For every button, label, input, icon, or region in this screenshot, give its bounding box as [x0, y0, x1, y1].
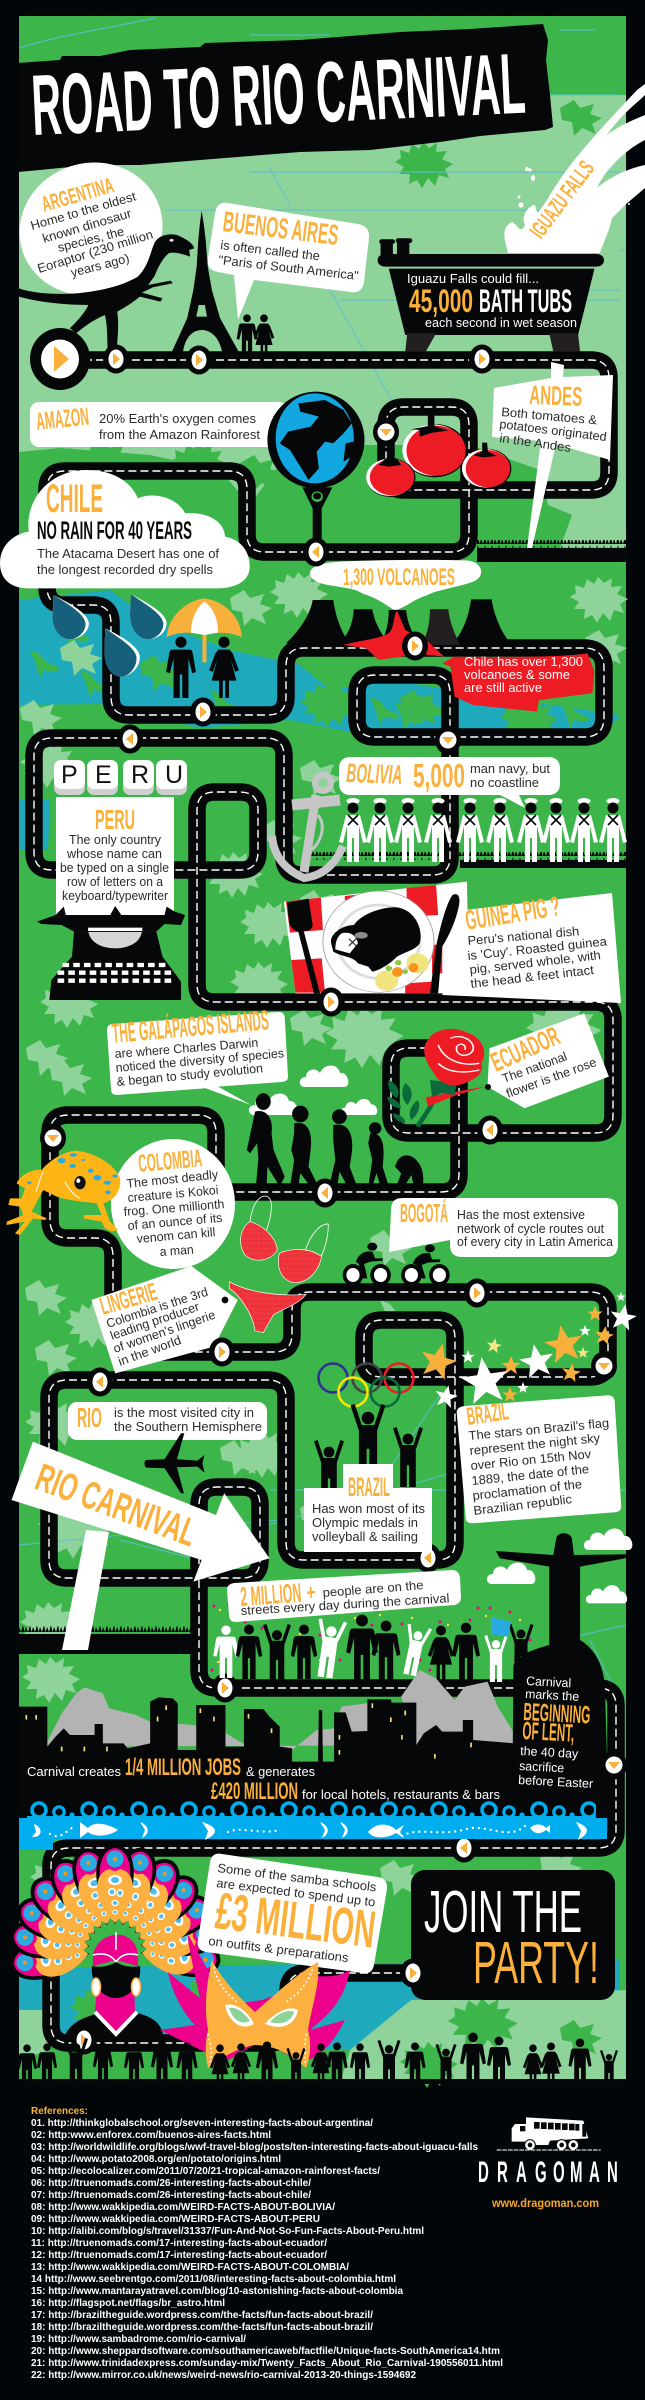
Rio text — [114, 1406, 262, 1434]
references list: 14 http://www.seebrentgo.com/2011/08/interesting-facts-about-colombia.html — [31, 2274, 396, 2285]
panel: Bogota bubble — [389, 1198, 618, 1257]
icon: Rio Carnival arrow sign — [12, 1442, 269, 1650]
references list: 09: http://www.wakkipedia.com/WEIRD-FACTS-ABOUT-PERU — [31, 2214, 320, 2225]
headdress cap and face — [93, 1935, 138, 1966]
icon: anchor — [272, 775, 343, 878]
water lines — [19, 18, 626, 1700]
references list: 04: http://www.potato2008.org/en/potato/origins.html — [31, 2154, 281, 2165]
tub text: Iguazu Falls could fill... — [407, 272, 539, 286]
panel: Brazil stars fact — [457, 1395, 621, 1523]
Galapagos text: noticed the diversity of species — [115, 1046, 285, 1075]
references list: 20: http://www.sheppardsoftware.com/southamericaweb/factfile/Unique-facts-SouthAmerica14.htm — [31, 2346, 500, 2357]
2 million text: streets every day during the carnival — [240, 1591, 450, 1618]
Lingerie text — [105, 1285, 217, 1369]
Chile text: the longest recorded dry spells — [37, 563, 213, 577]
panel: Rio — [68, 1402, 267, 1440]
title banner — [18, 24, 553, 172]
references list: 18: http://braziltheguide.wordpress.com/the-facts/fun-facts-about-brazil/ — [31, 2322, 373, 2333]
icon: tomatoes — [366, 415, 511, 497]
Peru key letters: P — [61, 761, 78, 789]
panel: Brazil podium — [304, 1464, 432, 1552]
Buenos Aires heading: BUENOS AIRES — [221, 206, 340, 252]
tub caption: each second in wet season — [425, 316, 577, 330]
references list: 03: http://worldwildlife.org/blogs/wwf-travel-blog/posts/ten-interesting-facts-about-iguacu-falls — [31, 2142, 478, 2153]
Amazon text: 20% Earth's oxygen comes — [99, 412, 256, 426]
icon: dinosaur — [19, 234, 194, 352]
5,000 number: 5,000 — [413, 757, 465, 794]
references list: 07: http://truenomads.com/26-interesting-facts-about-chile/ — [31, 2190, 311, 2201]
Brazil podium text: volleyball & sailing — [312, 1530, 418, 1544]
panel: mask — [160, 1933, 350, 2068]
Brazil text: proclamation of the — [472, 1477, 583, 1503]
Dragoman wordmark: DRAGOMAN — [478, 2157, 618, 2190]
Argentina heading: ARGENTINA — [38, 172, 117, 217]
panel: Andes sign — [492, 362, 613, 548]
Galapagos text: & began to study evolution — [116, 1061, 264, 1089]
Peru heading: PERU — [95, 804, 135, 835]
guinea pig text: Peru's national dish — [467, 924, 580, 948]
Peru text: keyboard/typewriter — [62, 889, 168, 903]
panel: Lent text — [518, 1674, 593, 1791]
Colombia text: frog. One millionth — [123, 1197, 225, 1219]
Bogota text: network of cycle routes out — [457, 1222, 604, 1236]
Christ the Redeemer statue — [496, 1533, 629, 1820]
Brazil podium text: Olympic medals in — [312, 1516, 418, 1530]
panel: guinea pig text — [442, 890, 621, 1003]
references list: 13: http://www.wakkipedia.com/WEIRD-FACTS-ABOUT-COLOMBIA/ — [31, 2262, 349, 2273]
Bolivia text: no coastline — [470, 776, 539, 790]
panel: Peru keys — [54, 760, 187, 795]
panel: jobs text: Carnival creates — [27, 1765, 121, 1779]
crowd confetti yellow — [218, 1610, 526, 1662]
Argentina text: species, the — [56, 224, 126, 255]
plus sign: + — [306, 1579, 316, 1605]
guinea pig text: pig, served whole, with — [469, 948, 601, 977]
volcano cloud — [310, 560, 481, 610]
references list: 05: http://ecolocalizer.com/2011/07/20/21-tropical-amazon-rainforest-facts/ — [31, 2166, 380, 2177]
Brazil text: Brazilian republic — [473, 1492, 573, 1518]
Rio text: the Southern Hemisphere — [114, 1420, 262, 1434]
stars — [417, 1292, 639, 1409]
icon: guinea pig on plate — [284, 882, 469, 993]
panel: Argentina — [3, 145, 179, 313]
bottom crowd — [17, 2033, 626, 2087]
panel: Colombia — [111, 1139, 235, 1269]
Bogota text: Has the most extensive — [457, 1208, 585, 1222]
icon: umbrella couple — [166, 598, 242, 698]
Bogota text: of every city in Latin America — [457, 1235, 613, 1249]
Lent caption — [518, 1744, 593, 1791]
references list: 06: http://truenomads.com/26-interesting-facts-about-chile/ — [31, 2178, 311, 2189]
Peru text: be typed on a single — [60, 861, 169, 875]
panel: Bolivia — [339, 757, 560, 808]
icon: Iguazu waterfall — [504, 84, 645, 253]
horizon grass strips — [19, 540, 626, 1654]
Colombia text: of an ounce of its — [127, 1211, 223, 1233]
3 million headline: £3 MILLION — [213, 1882, 378, 1959]
samba intro: are expected to spend up to — [216, 1876, 376, 1909]
Brazil text: 1889, the date of the — [471, 1462, 590, 1488]
sailors — [339, 798, 627, 862]
Peru text: row of letters on a — [67, 875, 163, 889]
Colombia text: a man — [159, 1243, 194, 1259]
Argentina text — [29, 189, 155, 280]
money headline: £420 MILLION — [211, 1778, 298, 1805]
lava text: Chile has over 1,300 — [464, 655, 583, 669]
Amazon text — [99, 412, 261, 442]
panel: Chile cloud: CHILE — [46, 477, 103, 521]
references list: 15: http://www.mantarayatravel.com/blog/10-astonishing-facts-about-colombia — [31, 2286, 403, 2297]
Iguazu Falls heading: IGUAZU FALLS — [524, 155, 599, 243]
crowd confetti — [212, 1604, 530, 1670]
references list: 02: http:www.enforex.com/buenos-aires-facts.html — [31, 2130, 271, 2141]
Bolivia text: man navy, but — [470, 762, 551, 776]
infographic canvas: THE GALÁPAGOS ISLANDS — [111, 1004, 270, 1049]
45,000 number: 45,000 — [409, 283, 473, 319]
references list: 12: http://truenomads.com/17-interesting-facts-about-ecuador/ — [31, 2250, 327, 2261]
panel: Amazon — [30, 402, 288, 447]
Lent caption: sacrifice — [519, 1759, 565, 1775]
Chile text: The Atacama Desert has one of — [37, 547, 220, 561]
Peru text: whose name can — [66, 847, 162, 861]
guinea pig text: the head & feet intact — [470, 963, 595, 991]
panel: headdress woman — [7, 1843, 223, 2040]
Rio heading: RIO — [77, 1402, 102, 1433]
volcano heading: 1,300 VOLCANOES — [343, 564, 455, 591]
panel: Ecuador tag — [485, 1013, 609, 1108]
panel: Peru paper — [56, 797, 174, 918]
Ecuador text: flower is the rose — [504, 1055, 598, 1101]
2 million text — [240, 1578, 450, 1618]
lava text: volcanoes & some — [464, 668, 570, 682]
water band with waves and fish — [19, 1800, 607, 1850]
Argentina text: known dinosaur — [41, 206, 133, 246]
panel: Lent text: marks the — [525, 1687, 580, 1704]
teal river band — [19, 590, 620, 2050]
Andes text: in the Andes — [499, 431, 572, 455]
clouds around Christ statue — [487, 1528, 632, 1603]
Bogota text — [457, 1208, 613, 1249]
Peru text: The only country — [69, 833, 162, 847]
samba caption: on outfits & preparations — [208, 1934, 349, 1965]
panel: Lingerie tag — [91, 1266, 238, 1373]
references list — [31, 2118, 503, 2381]
Colombia text: The most deadly — [126, 1167, 219, 1191]
panel: Colombia: COLOMBIA — [137, 1145, 203, 1178]
icon: frog — [7, 1151, 120, 1235]
no rain headline: NO RAIN FOR 40 YEARS — [37, 517, 192, 545]
Argentina text: Home to the oldest — [29, 189, 138, 233]
Brazil podium text: Has won most of its — [312, 1502, 425, 1516]
Andes heading: ANDES — [529, 380, 583, 412]
Argentina text: Eoraptor (230 million — [36, 227, 155, 276]
carnival crowd — [213, 1615, 534, 1682]
references list: 10: http://alibi.com/blog/s/travel/31337/Fun-And-Not-So-Fun-Facts-About-Peru.html — [31, 2226, 424, 2237]
panel: Brazil stars fact: BRAZIL — [465, 1397, 510, 1431]
clouds: evolution sky — [249, 1066, 377, 1115]
references list: 19: http://www.sambadrome.com/rio-carnival/ — [31, 2334, 246, 2345]
icon: airplane — [145, 1433, 204, 1493]
Andes text: Both tomatoes & — [501, 405, 598, 427]
Brazil text: over Rio on 15th Nov — [470, 1447, 592, 1473]
Colombia text: creature is Kokoi — [127, 1183, 219, 1205]
Bolivia text — [470, 762, 551, 790]
panel: 2 million: 2 MILLION — [239, 1578, 302, 1612]
Lent heading — [522, 1698, 591, 1748]
jobs suffix: & generates — [246, 1765, 315, 1779]
guinea pig text: is 'Cuy'. Roasted guinea — [467, 934, 608, 963]
Dragoman logo — [478, 2117, 618, 2210]
Amazon text: from the Amazon Rainforest — [99, 428, 261, 442]
Peru key letters: E — [95, 761, 112, 789]
Galapagos text: are where Charles Darwin — [114, 1036, 259, 1061]
Galapagos text — [114, 1036, 285, 1089]
Lingerie text: in the world — [116, 1333, 183, 1369]
Buenos Aires text — [218, 238, 359, 283]
panel: Chile cloud — [0, 470, 250, 588]
panel: Bogota bubble: BOGOTÁ — [400, 1198, 448, 1228]
Lent caption: before Easter — [518, 1773, 593, 1791]
panel: Brazil podium: BRAZIL — [348, 1472, 390, 1502]
money suffix: for local hotels, restaurants & bars — [302, 1788, 500, 1802]
Rio text: is the most visited city in — [114, 1406, 254, 1420]
panel: samba bubble — [198, 1854, 387, 1973]
Lent caption: the 40 day — [520, 1744, 579, 1761]
Colombia text — [123, 1167, 225, 1259]
Lent heading: OF LENT, — [522, 1717, 575, 1748]
icon: volcanoes — [286, 599, 510, 645]
panel: 2 million — [227, 1570, 461, 1622]
icon: truck — [497, 2117, 601, 2150]
jobs headline: 1/4 MILLION JOBS — [125, 1754, 241, 1781]
Chile text — [37, 547, 220, 577]
panel: lava fact — [344, 611, 594, 712]
markers — [40, 344, 617, 1862]
Andes text — [499, 405, 608, 455]
icon: Eiffel tower — [172, 211, 239, 352]
Peru key letters: R — [131, 761, 149, 789]
icon: Olympic rings — [318, 1364, 414, 1406]
icon: couple — [237, 314, 274, 357]
references list: 11: http://truenomads.com/17-interesting-facts-about-ecuador/ — [31, 2238, 327, 2249]
lava text: are still active — [464, 681, 542, 695]
icon: lingerie set — [229, 1196, 328, 1333]
icon: podium figures — [314, 1404, 423, 1500]
references list: 21: http://www.trinidadexpress.com/sunday-mix/Twenty_Facts_About_Rio_Carnival-190556011.html — [31, 2358, 503, 2369]
Brazil text: The stars on Brazil's flag — [468, 1416, 610, 1443]
references list: 17: http://braziltheguide.wordpress.com/the-facts/fun-facts-about-brazil/ — [31, 2310, 373, 2321]
references list: 16: http://flagspot.net/flags/br_astro.html — [31, 2298, 225, 2309]
Lingerie heading: LINGERIE — [97, 1278, 160, 1321]
references — [31, 2106, 503, 2381]
references list: 22: http://www.mirror.co.uk/news/weird-news/rio-carnival-2013-20-things-1594692 — [31, 2370, 416, 2381]
Peru key letters — [61, 761, 183, 789]
icon: cyclists — [343, 1243, 450, 1286]
Lingerie text: leading producer — [108, 1300, 201, 1343]
icon: typewriter — [37, 906, 185, 1000]
Andes text: potatoes originated — [499, 417, 608, 444]
references heading: References: — [31, 2106, 88, 2117]
references list: 01. http://thinkglobalschool.org/seven-interesting-facts-about-argentina/ — [31, 2118, 373, 2129]
Argentina text: years ago) — [69, 251, 131, 280]
start marker — [30, 328, 90, 390]
rain drops — [53, 594, 167, 677]
panel: join the party — [411, 1870, 615, 2000]
samba intro — [216, 1861, 377, 1909]
samba intro: Some of the samba schools — [217, 1861, 377, 1894]
Brazil text: represent the night sky — [469, 1431, 601, 1458]
shoulders — [66, 2012, 164, 2040]
Brazil podium text — [312, 1502, 425, 1544]
guinea pig text — [467, 924, 608, 991]
panel: jobs text — [27, 1754, 500, 1805]
panel: Buenos Aires speech bubble — [208, 203, 369, 320]
panel: Galapagos bubble — [107, 1004, 288, 1105]
Rio Carnival sign text: RIO CARNIVAL — [30, 1456, 202, 1555]
Brazil text — [468, 1416, 610, 1518]
Lingerie text: Colombia is the 3rd — [105, 1285, 210, 1331]
references list: 08: http://www.wakkipedia.com/WEIRD-FACTS-ABOUT-BOLIVIA/ — [31, 2202, 335, 2213]
panel: Lent text: Carnival — [526, 1674, 572, 1690]
panel: bath tub — [378, 238, 604, 352]
panel: Amazon: AMAZON — [35, 403, 90, 436]
Peru text — [60, 833, 169, 903]
Dragoman URL: www.dragoman.com — [491, 2196, 599, 2210]
lava text — [464, 655, 583, 695]
icon: globe — [267, 392, 365, 540]
city skyline — [19, 1670, 514, 1818]
road — [34, 360, 616, 2043]
Peru key letters: U — [165, 761, 183, 789]
2 million text: people are on the — [322, 1578, 424, 1600]
Buenos Aires text: "Paris of South America" — [218, 253, 359, 283]
Buenos Aires text: is often called the — [220, 238, 321, 263]
Lingerie text: of women's lingerie — [111, 1308, 217, 1356]
Bolivia heading: BOLIVIA — [346, 758, 403, 790]
icon: evolution silhouettes — [247, 1093, 423, 1187]
Colombia text: venom can kill — [136, 1225, 216, 1246]
icon: rose — [387, 1029, 488, 1127]
Ecuador text: The national — [500, 1049, 569, 1086]
Ecuador heading: ECUADOR — [486, 1021, 564, 1077]
